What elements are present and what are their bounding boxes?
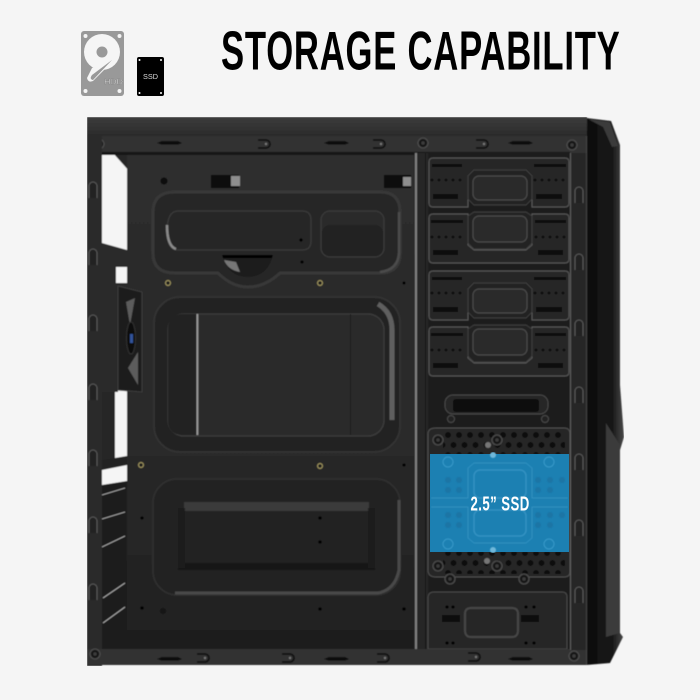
middle panel recess [154,297,400,452]
divider rail [414,153,428,650]
icon: HDD: HDD [104,77,124,86]
PC case interior [87,117,624,666]
highlight label: 2.5” SSD [470,493,529,515]
right rail [570,136,587,665]
title: STORAGE CAPABILITY [221,19,620,81]
fan [102,285,142,392]
rear opening and expansion slots [102,153,135,650]
drive bay frame [428,153,570,650]
lower panel recess [153,479,400,595]
upper screw rail [87,136,587,155]
left rail [87,136,102,666]
back panel [127,150,417,650]
case floor [102,630,417,650]
panel screws and holes [139,175,411,614]
case body [87,117,624,666]
upper panel recess [153,192,400,287]
2.5 inch drive plate [428,428,570,584]
icon: SSD: SSD [143,74,158,81]
2.5 inch SSD highlight [430,452,569,553]
top band [87,117,587,137]
icon: HDD [81,31,124,96]
front panel of case [586,118,624,665]
bottom bay [428,592,567,649]
5.25 inch bays [429,158,569,376]
bay slot opening [445,395,548,422]
icon: SSD [137,57,164,96]
lower screw rail [87,649,587,665]
